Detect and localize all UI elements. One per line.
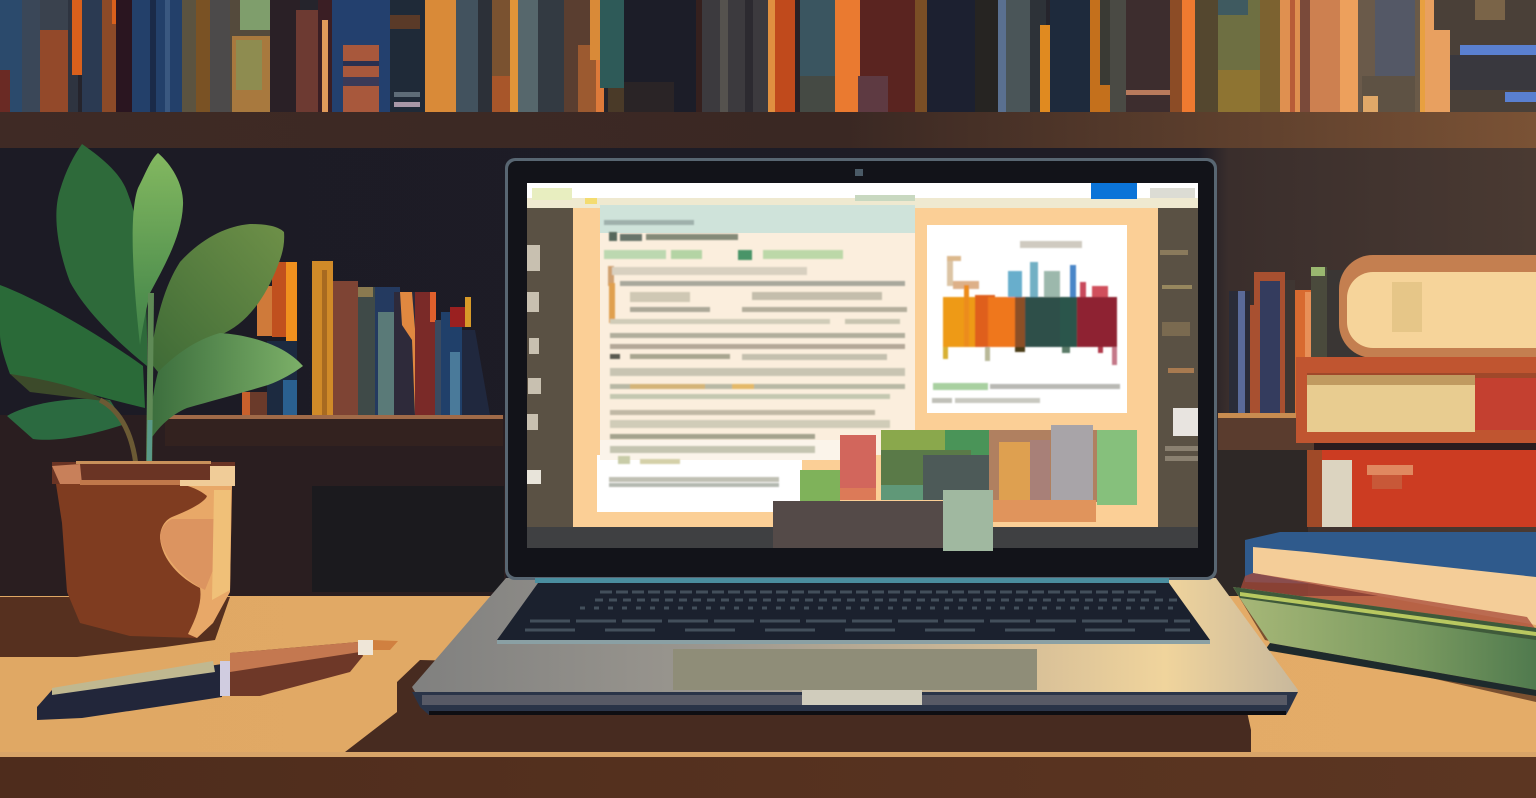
pot rim [52,461,235,486]
right sidebar [1160,250,1198,461]
gap between books [1314,443,1536,452]
screen [527,183,1198,551]
sage block overlay [943,490,993,551]
pot shadow on desk [0,597,230,657]
desk front edge [0,757,1536,798]
screen bottom bar [527,527,1198,548]
book: green [1233,587,1536,702]
books on left shelf [242,261,490,415]
notch [802,690,922,705]
front edge [412,692,1298,715]
cabinet under left shelf [0,415,506,597]
leaf: low dark [7,399,125,440]
browser toolbar [527,183,1198,208]
document panel [597,205,915,512]
stem [149,293,151,477]
left shelf plank [165,415,503,446]
bar chart [932,241,1120,403]
book: red with label [1307,450,1536,527]
book: rounded cream top [1339,255,1536,358]
content background [573,208,1158,527]
leaf: tall [56,144,147,366]
book: blue with cream pages [1240,532,1536,630]
screen bezel [505,158,1217,583]
pot [52,461,235,638]
back wall [0,148,1536,608]
keyboard [497,583,1210,640]
stacked books right [1233,255,1536,702]
upper shelf plank [0,112,1536,148]
top row of books [0,0,1536,112]
pot highlight [160,484,232,638]
small illustrated scene on screen [800,425,1137,522]
plant [0,144,303,478]
pot body [56,484,232,638]
chart card [927,225,1127,413]
leaf: right [150,224,284,372]
laptop [0,158,1536,757]
base [412,578,1298,715]
desk top [0,596,1536,754]
shadow [345,660,1251,752]
document text lines [604,220,907,487]
left sidebar icons [527,245,541,484]
book: cream pages and red [1296,357,1536,443]
pen [37,640,398,720]
leaf: lower right [147,333,303,446]
trackpad [673,649,1037,690]
leaf: left [0,285,145,408]
desk strip [0,752,1536,757]
books on right shelf [1229,267,1357,413]
lower shelf with books [0,261,1357,600]
leaf: tall light [133,153,183,345]
right shelf plank and lower wall [1218,413,1314,600]
dark block overlay [773,501,945,548]
